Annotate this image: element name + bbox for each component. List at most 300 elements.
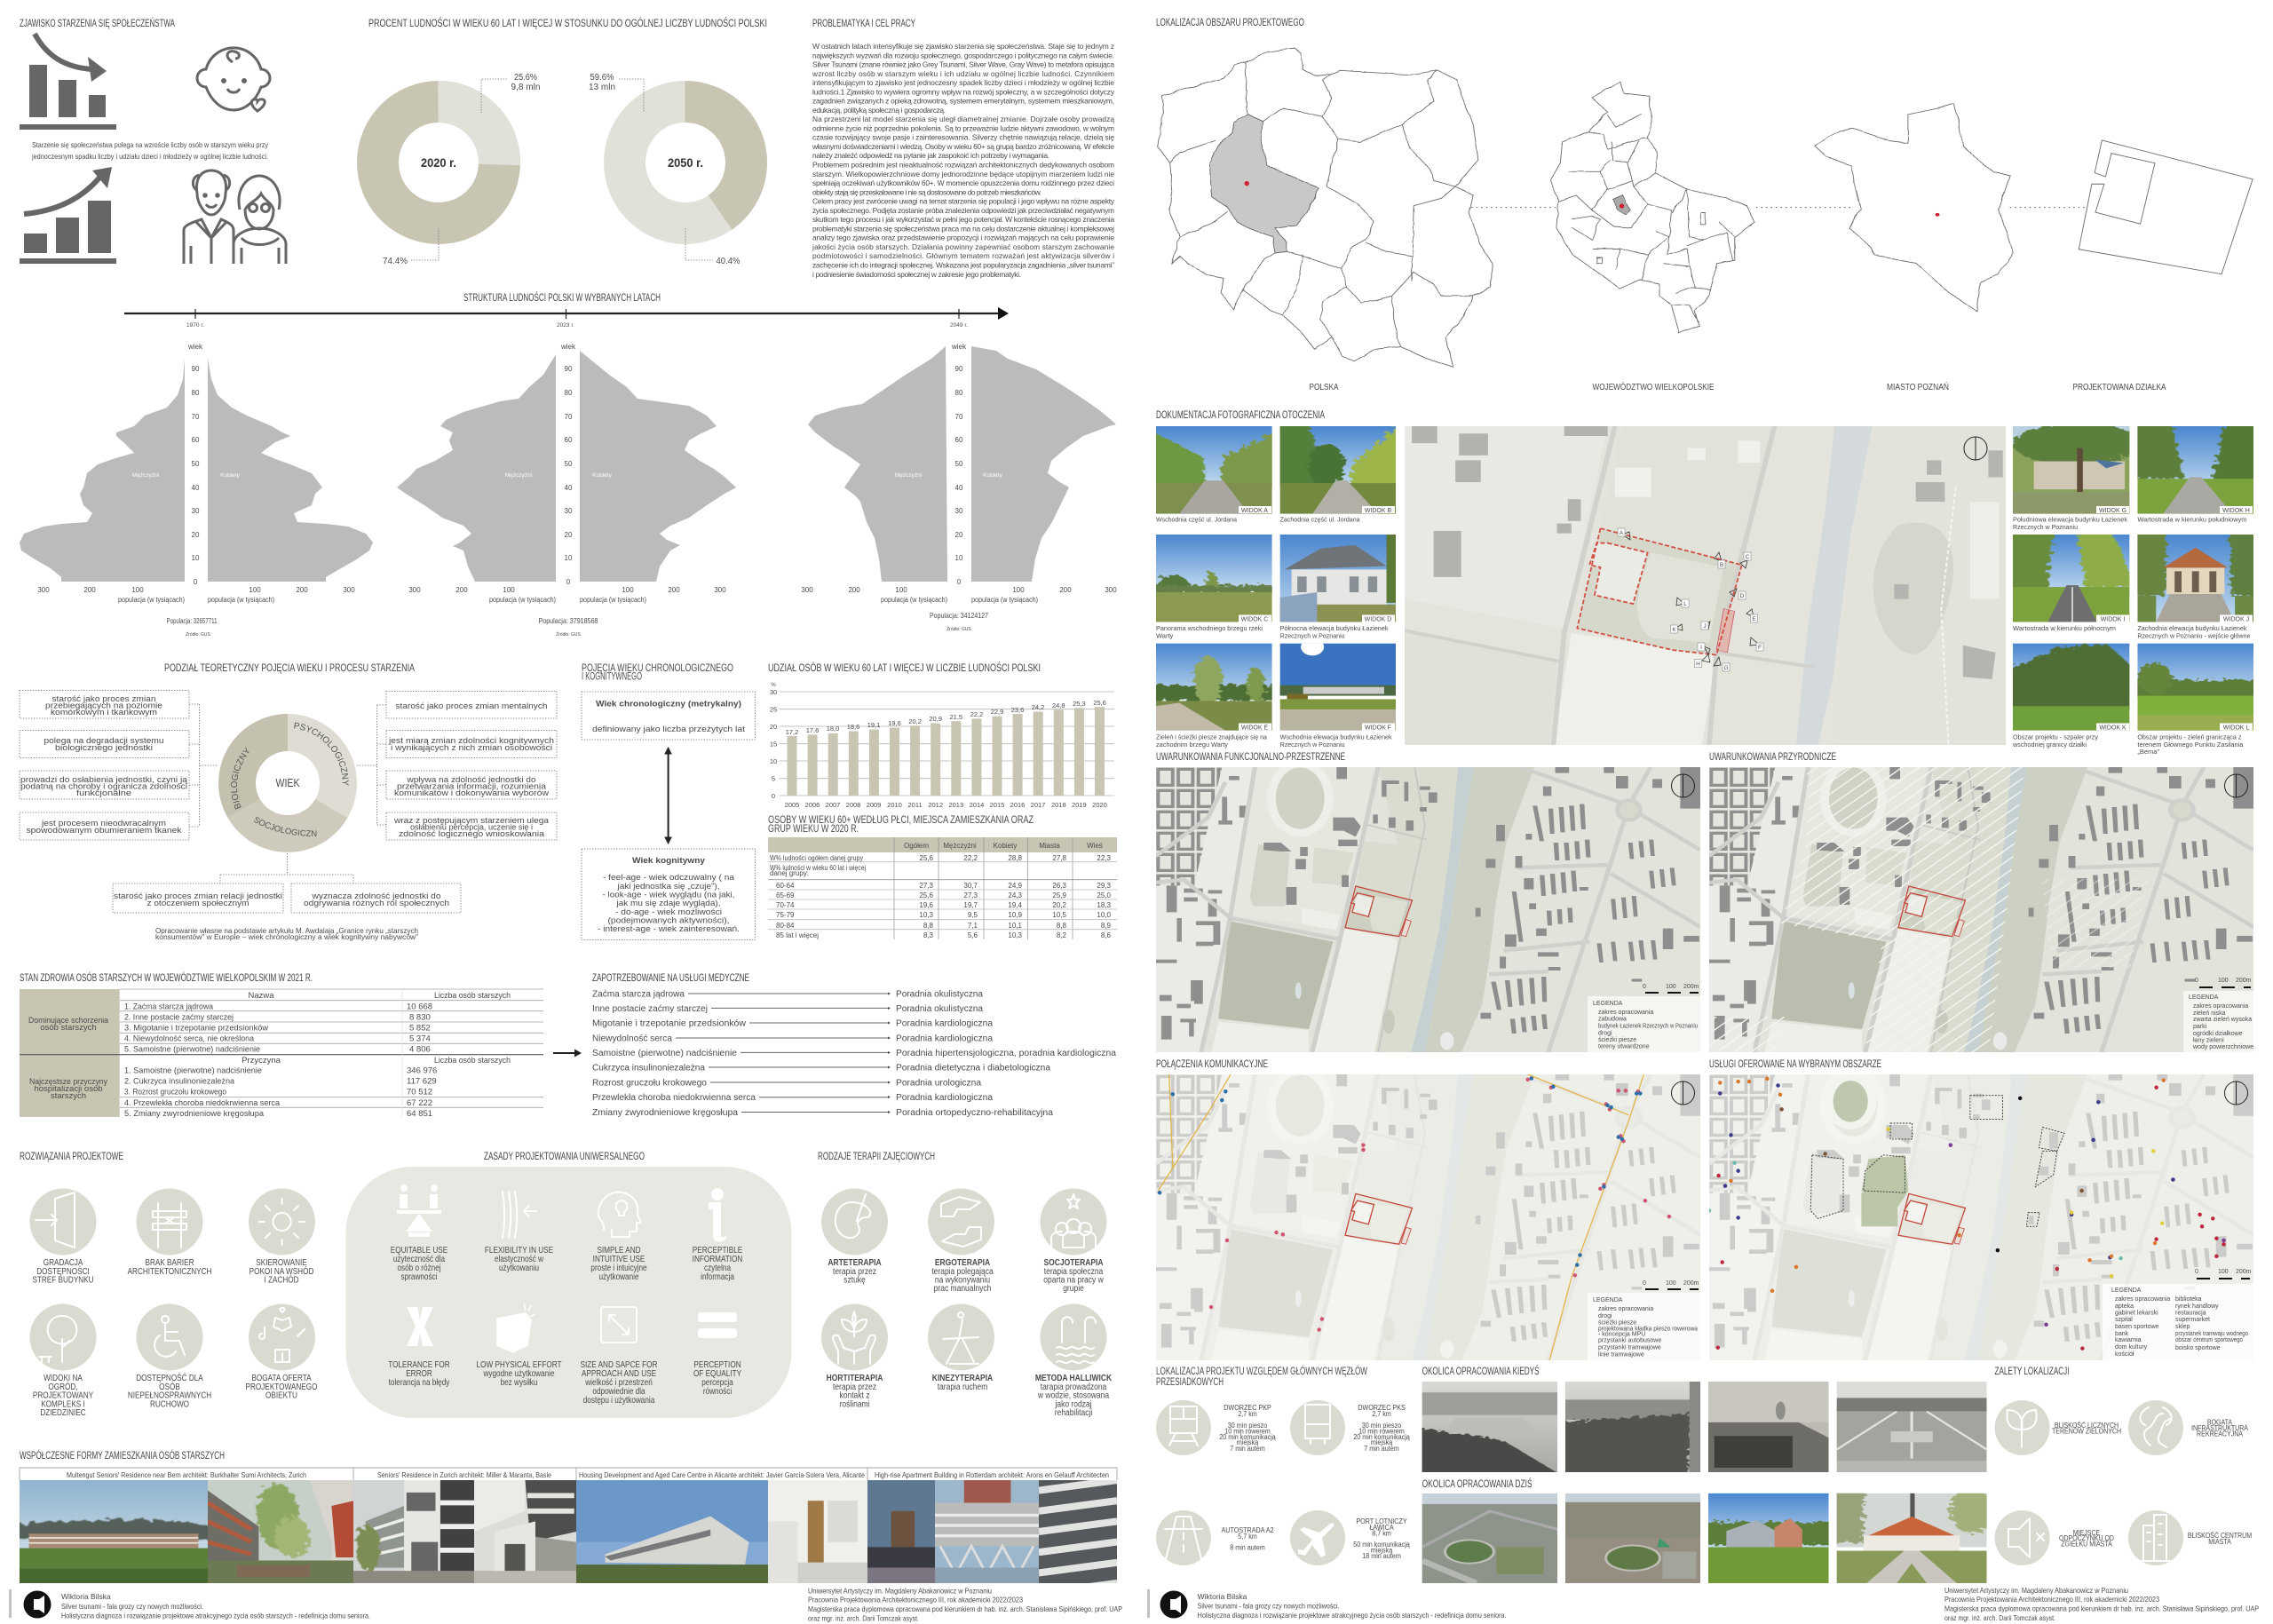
chart: population pyramid 1970: 40 [192, 484, 200, 492]
panel: occupational therapy types: sztukę [843, 1275, 866, 1285]
table: persons 60+: 10,0 [1097, 911, 1112, 919]
source note: Opracowanie własne na podstawie artykułu M. Awdalaja „Granice rynku „starszych [155, 927, 418, 935]
heading: okolica dzis: OKOLICA OPRACOWANIA DZIŚ [1422, 1477, 1532, 1490]
text block: problematyka i cel pracy: czasie rozwijający swoje pasje i zainteresowania. Silverzy chętnie nawiązują relacje, dzielą się [812, 133, 1114, 142]
chart: population pyramid 2023: 100 [622, 586, 634, 594]
chart: population pyramid 2049: 200 [848, 586, 860, 594]
map: services: kawiarnia [2115, 1337, 2142, 1343]
table: persons 60+: 5,6 [968, 931, 978, 939]
chart: share bar chart: 23,6 [1011, 706, 1024, 714]
panel: universal design principles: wielkość i przestrzeń [584, 1377, 653, 1387]
panel: occupational therapy types: oparta na pracy w [1043, 1275, 1104, 1285]
photos: left documentation grid: Rzecznych w Poznaniu [1280, 741, 1345, 749]
panel: design solutions: PROJEKTOWANY [33, 1390, 93, 1400]
panel: transport nodes: 30 min pieszo [1362, 1422, 1401, 1430]
panel: universal design principles: odpowiednie dla [592, 1386, 645, 1396]
chart: population pyramid 2049: 40 [955, 484, 963, 492]
photos: left documentation grid: WIDOK F [1365, 725, 1391, 732]
photos: right documentation grid: terenem Głównego Punktu Zasilania [2137, 741, 2244, 749]
chart: share bar chart: 2007 [826, 801, 840, 809]
panel: biological boxes: przebiegających na poziomie [45, 701, 162, 710]
text block: problematyka i cel pracy: spełniają oczekiwań użytkowników 60+. W momencie opuszczenia domu rodzinnego przez dzieci [812, 178, 1114, 187]
map: natural conditions: zakres opracowania [2193, 1003, 2248, 1010]
panel: universal design principles: elastyczność w [495, 1254, 543, 1264]
panel: occupational therapy types: kontakt z [840, 1390, 870, 1400]
map: natural conditions: wody powierzchniowe [2192, 1044, 2253, 1050]
panel: wiek chronologiczny: Wiek chronologiczny (metrykalny) [596, 700, 741, 709]
chart: population pyramid 1970: 30 [192, 507, 200, 515]
panel: wiek chronologiczny: definiowany jako liczba przeżytych lat [592, 725, 745, 734]
table: health of older persons: 67 222 [407, 1098, 432, 1108]
map: services: LEGENDA [2111, 1287, 2142, 1294]
panel: location advantages [1995, 1400, 2252, 1565]
panel: location advantages: ZGIEŁKU MIASTA [2061, 1540, 2112, 1549]
map: functional-spatial [1156, 760, 1700, 1052]
panel: design solutions: BOGATA OFERTA [251, 1373, 312, 1382]
map: functional-spatial: drogi [1598, 1030, 1612, 1037]
list: medical services demand: Poradnia hipertensjologiczna, poradnia kardiologiczna [896, 1049, 1116, 1058]
chart: share bar chart: 2012 [928, 801, 943, 809]
list: medical services demand: Zmiany zwyrodnieniowe kręgosłupa [592, 1108, 738, 1118]
table: persons 60+: 8,8 [1057, 922, 1067, 930]
photos: contemporary housing [1, 1480, 1117, 1594]
chart: population pyramid 1970: 20 [192, 531, 200, 539]
panel: universal design principles: OF EQUALITY [693, 1368, 741, 1378]
text block: problematyka i cel pracy: największych wyzwań dla rozwoju społecznego, gospodarczego i politycznego na całym świecie. [812, 51, 1114, 59]
panel: transport nodes: 2,7 km [1372, 1410, 1391, 1418]
table: persons 60+: 25,6 [919, 854, 934, 862]
panel: design solutions: WIDOKI NA [44, 1373, 83, 1382]
chart: donut 2050: 59.6% [590, 73, 614, 83]
chart: share bar chart: 18,0 [827, 725, 839, 733]
heading: polaczenia komunikacyjne: POŁĄCZENIA KOMUNIKACYJNE [1156, 1058, 1268, 1070]
text block: problematyka i cel pracy: odmienne życie niż poprzednie pokolenia. Są to przeważnie ludzie aktywni zawodowo, w wolnym [812, 123, 1114, 132]
panel: occupational therapy types: terapia przez [833, 1382, 876, 1391]
chart: share bar chart: 20,9 [929, 715, 942, 723]
text block: problematyka i cel pracy: intensyfikującym to zjawisko jest jednoczesny spadek liczby dzieci i młodzieży w ogólnej liczbie [812, 78, 1114, 87]
chart: population pyramid 2023: 30 [565, 507, 573, 515]
list: medical services demand: Samoistne (pierwotne) nadciśnienie [592, 1049, 737, 1058]
panel: biological boxes: podatną na choroby i ogranicza zdolności [20, 781, 187, 790]
chart: age division diagram: WIEK [275, 776, 300, 789]
panel: design solutions: I ZACHÓD [264, 1275, 299, 1285]
photos: left documentation grid: zachodnim brzegu Warty [1156, 741, 1228, 749]
text block: problematyka i cel pracy: własnymi doświadczeniami i wiedzą. Osoby w wieku 60+ są grupą bardzo zróżnicowaną. W efekcie [812, 142, 1114, 151]
panel: transport nodes: 18 min autem [1362, 1552, 1401, 1560]
table: health of older persons: 4 806 [409, 1044, 431, 1055]
chart: population pyramid 2023: 300 [714, 586, 726, 594]
map: services: 200m [2236, 1269, 2252, 1275]
chart: population pyramid 2049: 20 [955, 531, 963, 539]
map labels: WOJEWÓDZTWO WIELKOPOLSKIE [1593, 381, 1715, 392]
map: natural conditions: LEGENDA [2189, 994, 2219, 1001]
chart: population pyramid 1970: populacja (w tysiącach) [208, 596, 274, 604]
footer: author left: Wiktoria Bilska [61, 1592, 111, 1601]
footer: university right: Pracownia Projektowania Architektonicznego III, rok akademicki 2022/2023 [1944, 1595, 2159, 1604]
chart: population pyramid 1970 [20, 343, 373, 638]
map: services: 100 [2218, 1269, 2229, 1275]
photos: right documentation grid: Rzecznych w Poznaniu - wejście główne [2137, 632, 2250, 639]
panel: location advantages: REKREACYJNA [2197, 1430, 2243, 1438]
chart: donut 2020: 25.6% [514, 73, 537, 83]
arrow: timeline: 2023 r. [557, 322, 574, 329]
panel: universal design principles: dostępu i użytkowania [583, 1395, 655, 1405]
table: persons 60+: 75-79 [776, 911, 795, 919]
text block: problematyka i cel pracy: obiekty stają się przeskalowane i nie są dostosowane do potrzeb mieszkańców. [812, 187, 1041, 196]
map: functional-spatial: 200m [1683, 984, 1699, 990]
chart: population pyramid 1970: populacja (w tysiącach) [118, 596, 185, 604]
panel: design solutions: GRADACJA [44, 1257, 83, 1267]
panel: design solutions: DZIEDZINIEC [40, 1407, 86, 1417]
chart: population pyramid 2023: 10 [565, 554, 573, 562]
chart: population pyramid 1970: Kobiety [220, 472, 241, 479]
photos: left documentation grid: Zieleń i ścieżki piesze znajdujące się na [1156, 733, 1268, 741]
chart: share bar chart: 25,6 [1093, 699, 1106, 707]
panel: occupational therapy types: terapia przez [833, 1266, 876, 1276]
panel: universal design principles: informacja [701, 1271, 735, 1281]
heading: rodzaje terapii: RODZAJE TERAPII ZAJĘCIOWYCH [818, 1150, 935, 1162]
chart: donut 2020: 2020 r. [421, 155, 456, 170]
title: zjawisko starzenia: ZJAWISKO STARZENIA SIĘ SPOŁECZEŃSTWA [20, 16, 175, 29]
panel: transport nodes: 5,7 km [1238, 1533, 1257, 1541]
panel: biological boxes: polega na degradacji systemu [44, 736, 163, 745]
text block: problematyka i cel pracy: wzrost liczby osób w starszym wieku i ich udziału w ogólnej liczbie ludności. Czynnikiem [812, 69, 1114, 78]
chart: population pyramid 1970: 60 [192, 436, 200, 444]
table: persons 60+: 25,0 [1097, 891, 1112, 899]
table: persons 60+: Ogółem [904, 842, 929, 850]
map: services: biblioteka [2175, 1296, 2202, 1303]
map: services: przystanek tramwaju wodnego [2175, 1331, 2248, 1337]
panel: transport nodes: PORT LOTNICZY [1356, 1517, 1407, 1525]
chart: population pyramid 2023: 40 [565, 484, 573, 492]
table: health of older persons: osób starszych [40, 1023, 97, 1033]
table: health of older persons: 1. Zaćma starcza jądrowa [124, 1002, 214, 1012]
table: persons 60+: 80-84 [776, 922, 795, 930]
chart: population pyramid 2023: Źródło: GUS [556, 631, 582, 638]
heading: problematyka: PROBLEMATYKA I CEL PRACY [812, 17, 915, 29]
panel: transport nodes: ŁAWICA [1369, 1524, 1395, 1532]
panel: universal design principles: EQUITABLE USE [391, 1245, 447, 1255]
map: services: rynek handlowy [2175, 1303, 2219, 1310]
chart: share bar chart: 18,6 [847, 723, 859, 731]
table: persons 60+: 10,3 [1008, 931, 1023, 939]
panel: location advantages: MIASTA [2208, 1538, 2231, 1546]
table: persons 60+: 9,5 [968, 911, 978, 919]
photos: right documentation grid: Rzecznych w Poznaniu [2013, 523, 2078, 531]
table: persons 60+: 8,2 [1057, 931, 1067, 939]
chart: share bar chart: 2014 [970, 801, 984, 809]
chart: donut 2020: 9,8 mln [511, 83, 540, 92]
panel: occupational therapy types: METODA HALLIWICK [1035, 1373, 1112, 1382]
footer: university left: Magisterska praca dyplomowa opracowana pod kierunkiem dr hab. inż. arch. Stanisława Sipińskiego, prof. UAP [808, 1604, 1122, 1613]
chart: donut 2020 [378, 73, 540, 266]
panel: universal design principles: bez wysiłku [501, 1377, 537, 1387]
chart: share bar chart: 2008 [846, 801, 860, 809]
heading: rozwiazania projektowe: ROZWIĄZANIA PROJEKTOWE [20, 1150, 123, 1162]
chart: population pyramid 1970: Mężczyźni [132, 472, 159, 479]
map: site map with views: D [1740, 593, 1745, 599]
chart: share bar chart: 2017 [1031, 801, 1045, 809]
panel: transport nodes: 10 min rowerem [1358, 1427, 1405, 1436]
map: functional-spatial: zabudowa [1598, 1016, 1627, 1023]
chart: share bar chart: 2018 [1051, 801, 1066, 809]
panel: occupational therapy types: tarapia ruchem [938, 1382, 988, 1391]
table: persons 60+: Wieś [1087, 842, 1103, 850]
panel: occupational therapy types: w wodzie, stosowana [1037, 1390, 1110, 1400]
map: functional-spatial: 0 [1643, 984, 1646, 990]
chart: population pyramid 2023: 70 [565, 413, 573, 421]
chart: population pyramid 1970: 200 [83, 586, 96, 594]
panel: transport nodes: 2,7 km [1238, 1410, 1257, 1418]
chart: population pyramid 2049: populacja (w tysiącach) [881, 596, 947, 604]
caption strip: housing examples: Housing Development and Aged Care Centre in Alicante architekt: Javier García-Solera Vera, Alicante [579, 1470, 865, 1479]
map: functional-spatial: tereny utwardzone [1598, 1044, 1650, 1050]
chart: share bar chart: 20,2 [908, 717, 922, 725]
map: site map with views: F [1758, 645, 1762, 651]
list: medical services demand: Poradnia dietetyczna i diabetologiczna [896, 1064, 1050, 1073]
panel: design solutions: BRAK BARIER [145, 1257, 194, 1267]
panel: design solutions: STREF BUDYNKU [32, 1275, 94, 1285]
photos: left documentation grid: Panorama wschodniego brzegu rzeki [1156, 624, 1263, 632]
chart: population pyramid 2023: 60 [565, 436, 573, 444]
chart: population pyramid 2049: wiek [951, 343, 967, 351]
chart: share bar chart: 2011 [908, 801, 923, 809]
map: transport connections: projektowana kładka pieszo rowerowa [1598, 1327, 1698, 1332]
heading: osoby w wieku 60+ [768, 813, 1034, 835]
table: persons 60+: 8,8 [923, 922, 934, 930]
heading: osoby w wieku 60+: OSOBY W WIEKU 60+ WEDŁUG PŁCI, MIEJSCA ZAMIESZKANIA ORAZ [768, 813, 1034, 826]
panel: transport nodes: 8 min autem [1230, 1543, 1265, 1552]
chart: share bar chart: 19,6 [888, 719, 901, 727]
icon: rising bar chart [20, 167, 116, 264]
table: health of older persons: Przyczyna [242, 1056, 281, 1066]
map: site map with views: L [1683, 601, 1687, 607]
table: health of older persons: 2. Cukrzyca insulinoniezależna [124, 1076, 235, 1087]
table: persons 60+: W% ludności w wieku 60 lat i więcej [770, 864, 866, 872]
table: persons 60+: 24,9 [1008, 882, 1023, 890]
table: health of older persons: 117 629 [407, 1076, 437, 1087]
panel: transport nodes: miejską [1371, 1546, 1393, 1555]
table: health of older persons [20, 989, 543, 1119]
photos: left documentation grid: Północna elewacja budynku Łazienek [1280, 624, 1389, 632]
panel: occupational therapy types: terapia polegająca [931, 1266, 994, 1276]
table: persons 60+: 19,7 [963, 901, 978, 909]
panel: universal design principles: ERROR [406, 1368, 432, 1378]
table: persons 60+: 70-74 [776, 901, 795, 909]
chart: share bar chart: 25 [770, 706, 777, 714]
table: persons 60+: 8,9 [1101, 922, 1112, 930]
map: services: supermarket [2175, 1317, 2210, 1323]
map: services: basen sportowe [2115, 1324, 2159, 1330]
panel: location advantages: ODPOCZYNKU OD [2059, 1534, 2115, 1542]
map: site map with views [1405, 426, 2006, 745]
panel: universal design principles: SIZE AND SAPCE FOR [581, 1359, 658, 1369]
map: services: obszar centrum sportowego [2175, 1337, 2243, 1343]
panel: biological boxes: komórkowym i tkankowym [51, 708, 157, 717]
photos: right documentation grid: „Bema” [2137, 748, 2159, 756]
table: persons 60+: 19,6 [919, 901, 934, 909]
chart: population pyramid 2049: 100 [895, 586, 907, 594]
table: persons 60+: 25,9 [1052, 891, 1067, 899]
chart: population pyramid 2049: 60 [955, 436, 963, 444]
panel: design solutions: OSÓB [159, 1382, 180, 1391]
panel: transport nodes: 10 min rowerem [1224, 1427, 1271, 1436]
table: health of older persons: 5 852 [409, 1023, 431, 1034]
panel: biological boxes: jest procesem nieodwracalnym [41, 819, 166, 828]
panel: universal design principles: SIMPLE AND [597, 1245, 641, 1255]
source note [155, 927, 418, 941]
chart: population pyramid 2049: 90 [955, 365, 963, 373]
list: medical services demand: Przewlekła choroba niedokrwienna serca [592, 1093, 756, 1103]
panel: psychological boxes: osłabieniu percepcja, uczenie się i [410, 822, 533, 831]
table: health of older persons: 3. Rozrost gruczołu krokowego [124, 1087, 226, 1097]
map: transport connections: drogi [1598, 1313, 1612, 1319]
panel: psychological boxes: starość jako proces zmian mentalnych [396, 701, 547, 710]
table: health of older persons: 5. Zmiany zwyrodnieniowe kręgosłupa [124, 1109, 265, 1119]
panel: occupational therapy types: HORTITERAPIA [827, 1373, 883, 1382]
panel: design solutions: OGRÓD, [48, 1382, 78, 1391]
chart: share bar chart: 2006 [805, 801, 820, 809]
panel: universal design principles: PERCEPTIBLE [693, 1245, 742, 1255]
panel: transport nodes: DWORZEC PKP [1224, 1404, 1271, 1412]
map: Poznan city [1814, 103, 2014, 313]
panel: transport nodes: 7 min autem [1230, 1445, 1265, 1453]
panel: design solutions: NIEPEŁNOSPRAWNYCH [128, 1390, 211, 1400]
table: persons 60+: 10,1 [1008, 922, 1023, 930]
text block: problematyka i cel pracy: Problemem pośrednim jest nieaktualność rozwiązań architektonicznych dedykowanych osobom [812, 160, 1114, 169]
photos: right documentation grid: Zachodnia elewacja budynku Łazienek [2137, 624, 2247, 632]
map: site map with views: A [1620, 530, 1624, 536]
footer: author left: Holistyczna diagnoza i rozwiązanie projektowe atrakcyjnego życia osób starszych - redefinicja domu seniora. [61, 1611, 370, 1620]
panel: transport nodes: 30 min pieszo [1228, 1422, 1267, 1430]
table: health of older persons: Najczęstsze przyczyny [29, 1077, 107, 1087]
table: persons 60+: danej grupy: [770, 869, 809, 877]
chart: share bar chart: 30 [770, 688, 777, 696]
table: persons 60+: W% ludności ogółem danej grupy [770, 854, 863, 862]
table: persons 60+: 65-69 [776, 891, 795, 899]
text block: problematyka i cel pracy [812, 42, 1115, 279]
photos: left documentation grid: WIDOK D [1365, 616, 1391, 623]
heading: lokalizacja obszaru: LOKALIZACJA OBSZARU PROJEKTOWEGO [1156, 16, 1304, 28]
footer: author left [9, 1589, 370, 1620]
chart: share bar chart [770, 683, 1114, 809]
panel: psychological boxes: i wynikających z nich zmian osobowości [391, 743, 552, 752]
chart: population pyramid 2049: Kobiety [983, 472, 1003, 479]
chart: share bar chart: 20 [770, 723, 777, 731]
panel: biological boxes [20, 691, 189, 840]
chart: population pyramid 1970: 300 [343, 586, 355, 594]
map: transport connections: 0 [1643, 1280, 1646, 1287]
chart: population pyramid 1970: wiek [187, 343, 203, 351]
chart: population pyramid 2049 [801, 343, 1117, 632]
table: health of older persons: 3. Migotanie i trzepotanie przedsionków [124, 1023, 268, 1034]
panel: universal design principles: użytkowaniu [499, 1263, 539, 1272]
panel: design solutions: ARCHITEKTONICZNYCH [128, 1266, 211, 1276]
panel: sociological boxes [113, 883, 461, 913]
table: persons 60+: 10,5 [1052, 911, 1067, 919]
chart: population pyramid 2049: 80 [955, 389, 963, 397]
table: persons 60+: 8,6 [1101, 931, 1112, 939]
heading: wspolczesne formy: WSPÓŁCZESNE FORMY ZAMIESZKANIA OSÓB STARSZYCH [20, 1448, 225, 1462]
table: health of older persons: Liczba osób starszych [434, 1056, 511, 1066]
chart: donut 2050 [589, 73, 746, 266]
chart: population pyramid 1970: 100 [249, 586, 261, 594]
photos: left documentation grid: WIDOK E [1241, 725, 1268, 732]
panel: location advantages: TERENÓW ZIELONYCH [2052, 1427, 2121, 1436]
panel: transport nodes: 50 min komunikacją [1353, 1541, 1411, 1549]
chart: population pyramid 2023: 20 [565, 531, 573, 539]
map: transport connections: przystanki autobusowe [1598, 1337, 1661, 1344]
text block: problematyka i cel pracy: edukacją, polityką społeczną i gospodarczą. [812, 106, 946, 115]
photos: left documentation grid: Wschodnia część ul. Jordana [1156, 515, 1238, 524]
heading: lokalizacja projektu [1156, 1364, 1367, 1388]
table: health of older persons: Nazwa [248, 991, 274, 1001]
list: medical services demand: Poradnia kardiologiczna [896, 1034, 993, 1044]
chart: share bar chart: 24,2 [1032, 703, 1044, 711]
text block: problematyka i cel pracy: analizy tego zjawiska oraz przedstawienie propozycji i rozwiązań mających na celu poprawienie [812, 234, 1114, 242]
table: health of older persons: 346 976 [407, 1066, 437, 1076]
table: persons 60+: 28,8 [1008, 854, 1023, 862]
text block: problematyka i cel pracy: starszym. Wielkopowierzchniowe domy jednorodzinne będące utopijnym marzeniem ludzi nie [812, 170, 1114, 178]
icon: baby face [197, 48, 270, 111]
icon: elderly couple [184, 170, 286, 264]
map: natural conditions: 200m [2236, 978, 2252, 984]
footer: university left [808, 1586, 1122, 1623]
chart: share bar chart: 19,1 [867, 721, 880, 729]
heading: pojecia wieku: I KOGNITYWNEGO [582, 669, 642, 682]
chart: share bar chart: 2020 [1092, 801, 1107, 809]
chart: population pyramid 1970: 80 [192, 389, 200, 397]
footer: university right [1944, 1586, 2259, 1622]
chart: population pyramid 1970: Populacja: 32657711 [167, 616, 218, 625]
chart: share bar chart: 17,6 [806, 726, 819, 734]
panel: universal design principles: sprawności [401, 1271, 437, 1281]
map: Wielkopolskie voivodeship [1550, 82, 1755, 334]
panel: wiek kognitywny: - look-age - wiek wyglądu (na jaki, [602, 890, 735, 900]
table: persons 60+: 26,3 [1052, 882, 1067, 890]
photos: left documentation grid: WIDOK A [1241, 508, 1268, 514]
caption strip: housing examples: Seniors' Residence in Zurich architekt: Miller & Maranta, Basle [377, 1470, 551, 1479]
arrow: table to demand [553, 1050, 582, 1057]
chart: share bar chart: 2005 [785, 801, 799, 809]
map: site map with views: J [1703, 623, 1707, 630]
panel: occupational therapy types: ERGOTERAPIA [935, 1257, 990, 1267]
map: services: sklep [2175, 1324, 2190, 1330]
chart: age division diagram: BIOLOGICZNY [231, 748, 249, 810]
map: functional-spatial: zakres opracowania [1598, 1010, 1653, 1016]
photos: left documentation grid: WIDOK B [1365, 508, 1391, 514]
chart: population pyramid 2049: 10 [955, 554, 963, 562]
caption: definition of ageing: Starzenie się społeczeństwa polega na wzroście liczby osób w starszym wieku przy [32, 140, 269, 149]
panel: biological boxes: starość jako proces zmian [51, 694, 156, 703]
panel: biological boxes: spowodowanym obumieraniem tkanek [27, 826, 182, 835]
panel: transport nodes: 20 min komunikacją [1219, 1433, 1277, 1441]
chart: population pyramid 2023: 0 [566, 578, 571, 586]
list: medical services demand: Cukrzyca insulinoniezależna [592, 1064, 705, 1073]
heading: percent of population: PROCENT LUDNOŚCI W WIEKU 60 LAT I WIĘCEJ W STOSUNKU DO OGÓLNEJ LICZBY LUDNOŚCI POLSKI [368, 16, 767, 29]
map: site map with views: K [1672, 627, 1676, 633]
map: functional-spatial: 100 [1666, 984, 1676, 990]
panel: occupational therapy types: rehabilitacji [1055, 1407, 1092, 1417]
chart: share bar chart: % [771, 683, 776, 688]
heading: lokalizacja projektu: PRZESIADKOWYCH [1156, 1375, 1224, 1388]
panel: wiek kognitywny: jak mu się zdaje wygląda), [615, 899, 721, 908]
panel: biological boxes: biologicznego jednostki [55, 743, 153, 752]
heading: lokalizacja projektu: LOKALIZACJA PROJEKTU WZGLĘDEM GŁÓWNYCH WĘZŁÓW [1156, 1364, 1367, 1377]
panel: universal design principles: równości [703, 1386, 732, 1396]
heading: podzial teoretyczny: PODZIAŁ TEORETYCZNY POJĘCIA WIEKU I PROCESU STARZENIA [164, 661, 415, 674]
chart: share bar chart: 22,2 [970, 710, 983, 718]
